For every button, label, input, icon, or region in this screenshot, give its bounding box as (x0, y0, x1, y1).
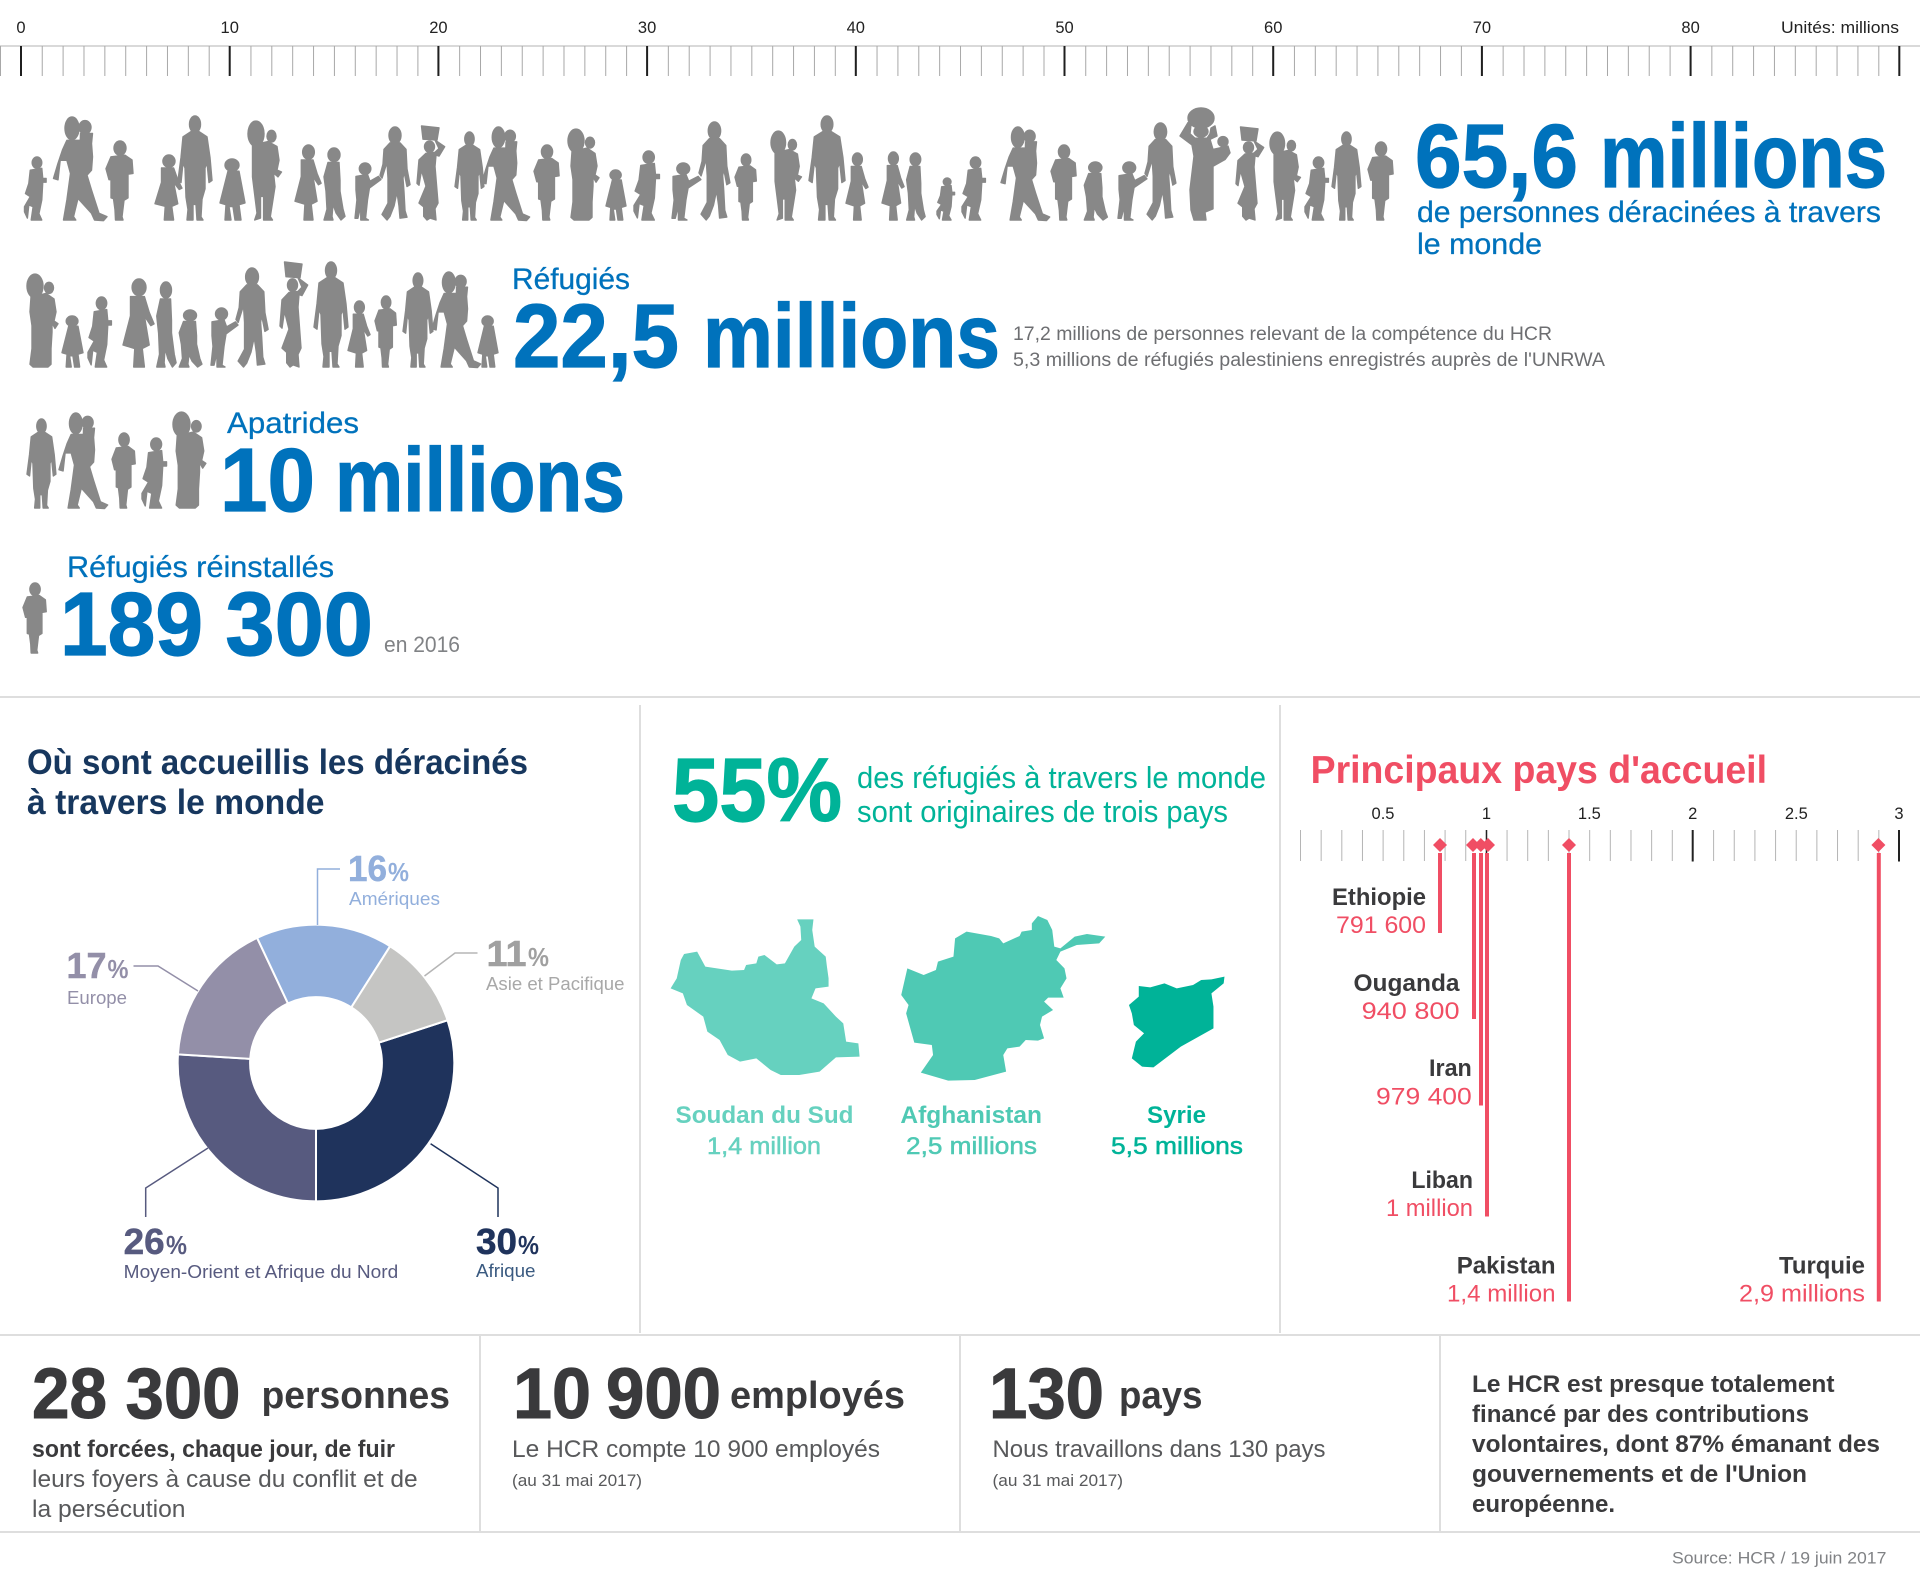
label: Afghanistan: 2,5 millions (906, 1133, 1037, 1160)
donut label: Moyen-Orient: % (166, 1230, 187, 1260)
réfugiés detail text: 17,2 millions de personnes relevant de la compétence du HCR (1013, 324, 1552, 345)
marker: Iran: 979 400 (1376, 1084, 1472, 1110)
marker: Ethiopie: 791 600 (1336, 912, 1426, 939)
headline: apatrides 10 millions (220, 407, 625, 531)
panel: principaux pays d'accueil (1300, 749, 1904, 1308)
axis (1300, 805, 1904, 862)
marker: Turquie: Turquie (1779, 1252, 1865, 1280)
donut label: Asie et Pacifique: Asie et Pacifique (486, 973, 624, 994)
top ruler: 30 (638, 19, 656, 37)
axis: 1 (1482, 805, 1491, 823)
headline: 65,6 millions (1415, 107, 1887, 261)
headline: réfugiés réinstallés 189 300: en 2016 (384, 632, 460, 657)
marker: Ethiopie: Ethiopie (1332, 884, 1426, 911)
silhouettes: apatrides row (27, 412, 206, 509)
stat: 130 pays: (au 31 mai 2017) (992, 1471, 1123, 1490)
marker: Iran (1376, 838, 1488, 1110)
marker: Turquie (1739, 838, 1885, 1308)
marker: Liban (1386, 838, 1495, 1222)
label: Soudan du Sud: 1,4 million (707, 1133, 821, 1160)
label: Afghanistan: Afghanistan (900, 1102, 1042, 1129)
stat: 28 300 personnes (32, 1355, 450, 1523)
headline: 65,6 millions: 65,6 (1415, 107, 1578, 207)
source note: Source: HCR / 19 juin 2017 (1672, 1548, 1886, 1567)
marker: Pakistan: 1,4 million (1447, 1280, 1556, 1308)
donut label: Europe: Europe (67, 987, 127, 1008)
headline: apatrides 10 millions: Apatrides (227, 407, 359, 440)
stat: 10 900 employés: Le HCR compte 10 900 employés (512, 1436, 880, 1463)
donut label: Amériques (318, 848, 440, 925)
label: Syrie: 5,5 millions (1111, 1133, 1243, 1160)
donut label: Moyen-Orient: Moyen-Orient et Afrique du Nord (124, 1261, 398, 1282)
réfugiés detail text (1013, 324, 1605, 371)
stat: 130 pays: pays (1119, 1375, 1202, 1417)
stat: 28 300 personnes: 300 (126, 1355, 240, 1434)
heading: Où sont accueillis les déracinés (27, 743, 528, 782)
top ruler: 0 (16, 19, 26, 37)
donut chart (178, 925, 454, 1201)
headline: réfugiés réinstallés 189 300: 300 (225, 575, 373, 675)
headline: apatrides 10 millions: millions (335, 431, 625, 531)
headline: 65,6 millions: le monde (1417, 228, 1542, 261)
panel: 55% origine des réfugiés (671, 741, 1266, 1160)
marker: Ouganda: 940 800 (1362, 998, 1460, 1025)
stat: 10 900 employés: 10 (513, 1355, 591, 1434)
top ruler: 10 (221, 19, 239, 37)
stat: 28 300 personnes: leurs foyers à cause du conflit et de (32, 1466, 418, 1493)
donut label: Amériques: 16 (348, 848, 387, 889)
headline: réfugiés 22,5 millions: millions (703, 287, 1000, 387)
top ruler: 70 (1473, 19, 1491, 37)
text block: financement du HCR (1472, 1371, 1880, 1518)
marker: Ouganda (1354, 838, 1480, 1025)
stat: 10 900 employés: (au 31 mai 2017) (512, 1471, 642, 1490)
stat: 10 900 employés: employés (730, 1375, 905, 1417)
text block: financement du HCR: volontaires, dont 87% émanant des (1472, 1431, 1880, 1458)
donut label: Afrique: Afrique (476, 1260, 536, 1281)
marker: Iran: Iran (1429, 1055, 1472, 1082)
map: Soudan du Sud (671, 919, 860, 1075)
intro text (857, 760, 1266, 829)
top ruler: 20 (429, 19, 448, 37)
headline: apatrides 10 millions: 10 (220, 431, 315, 531)
marker: Liban: 1 million (1386, 1195, 1473, 1222)
stat: 10 900 employés: 900 (606, 1355, 721, 1434)
top ruler: 60 (1264, 19, 1282, 37)
stat: 10 900 employés (512, 1355, 905, 1490)
marker: Turquie: 2,9 millions (1739, 1280, 1865, 1308)
donut label: Asie et Pacifique (424, 933, 624, 994)
stat: 28 300 personnes: 28 (32, 1355, 107, 1434)
text block: financement du HCR: financé par des contributions (1472, 1401, 1809, 1428)
donut label: Asie et Pacifique: % (528, 942, 549, 972)
axis: 1.5 (1578, 805, 1601, 823)
silhouettes: 65,6 millions row (24, 108, 1393, 221)
label: Soudan du Sud (676, 1102, 854, 1160)
headline: réfugiés 22,5 millions: 22,5 (513, 287, 679, 387)
heading (27, 743, 528, 822)
marker: Pakistan (1447, 838, 1576, 1308)
donut label: Amériques: Amériques (349, 888, 440, 909)
marker: Ouganda: Ouganda (1354, 970, 1460, 997)
text block: financement du HCR: européenne. (1472, 1491, 1615, 1518)
panel: où sont accueillis (27, 743, 624, 1282)
text block: financement du HCR: Le HCR est presque totalement (1472, 1371, 1835, 1398)
axis: 3 (1894, 805, 1904, 823)
marker: Liban: Liban (1411, 1167, 1473, 1194)
donut label: Afrique (431, 1144, 539, 1281)
headline: réfugiés 22,5 millions: Réfugiés (512, 263, 630, 296)
label: Syrie: Syrie (1147, 1102, 1206, 1129)
silhouettes: réfugiés row (27, 262, 498, 368)
heading: Principaux pays d'accueil (1311, 749, 1767, 792)
map: Syrie (1129, 977, 1224, 1067)
headline: réfugiés réinstallés 189 300: Réfugiés réinstallés (67, 551, 334, 584)
donut label: Moyen-Orient (124, 1148, 398, 1282)
label: Soudan du Sud: Soudan du Sud (676, 1102, 854, 1129)
stat: 130 pays: Nous travaillons dans 130 pays (992, 1436, 1326, 1463)
axis: 2 (1688, 805, 1697, 823)
donut label: Afrique: 30 (476, 1221, 517, 1262)
headline: 65,6 millions: de personnes déracinées à travers (1417, 196, 1881, 229)
text block: financement du HCR: gouvernements et de l'Union (1472, 1461, 1807, 1488)
réfugiés detail text: 5,3 millions de réfugiés palestiniens enregistrés auprès de l'UNRWA (1013, 350, 1605, 371)
donut label: Europe (66, 945, 198, 1008)
top ruler (0, 19, 1920, 61)
headline: réfugiés 22,5 millions (512, 263, 1000, 387)
stat: 28 300 personnes: sont forcées, chaque jour, de fuir (32, 1436, 395, 1463)
donut label: Moyen-Orient: 26 (124, 1221, 165, 1262)
donut label: Asie et Pacifique: 11 (486, 933, 526, 974)
donut label: Europe: % (108, 954, 128, 984)
stat: 28 300 personnes: la persécution (32, 1496, 186, 1523)
donut label: Amériques: % (388, 857, 409, 887)
headline: réfugiés réinstallés 189 300 (60, 551, 460, 675)
intro text: des réfugiés à travers le monde (857, 760, 1266, 795)
big figure 55%: 55% (672, 741, 842, 841)
label: Syrie (1111, 1102, 1243, 1160)
donut label: Afrique: % (518, 1230, 539, 1260)
axis: 0.5 (1372, 805, 1394, 823)
silhouette: réinstallés (23, 583, 46, 653)
top ruler: Unités: millions (1781, 19, 1899, 37)
axis: 2.5 (1785, 805, 1808, 823)
intro text: sont originaires de trois pays (857, 794, 1228, 829)
headline: réfugiés réinstallés 189 300: 189 (60, 575, 203, 675)
label: Afghanistan (900, 1102, 1042, 1160)
top ruler: 40 (847, 19, 865, 37)
marker: Ethiopie (1332, 838, 1447, 939)
stat: 28 300 personnes: personnes (262, 1375, 450, 1417)
top ruler: 50 (1055, 19, 1074, 37)
marker: Pakistan: Pakistan (1457, 1252, 1556, 1280)
stat: 130 pays (989, 1355, 1326, 1490)
top ruler: 80 (1681, 19, 1700, 37)
heading: à travers le monde (27, 783, 324, 822)
stat: 130 pays: 130 (989, 1355, 1104, 1434)
map: Afghanistan (901, 916, 1105, 1081)
donut label: Europe: 17 (66, 945, 106, 986)
